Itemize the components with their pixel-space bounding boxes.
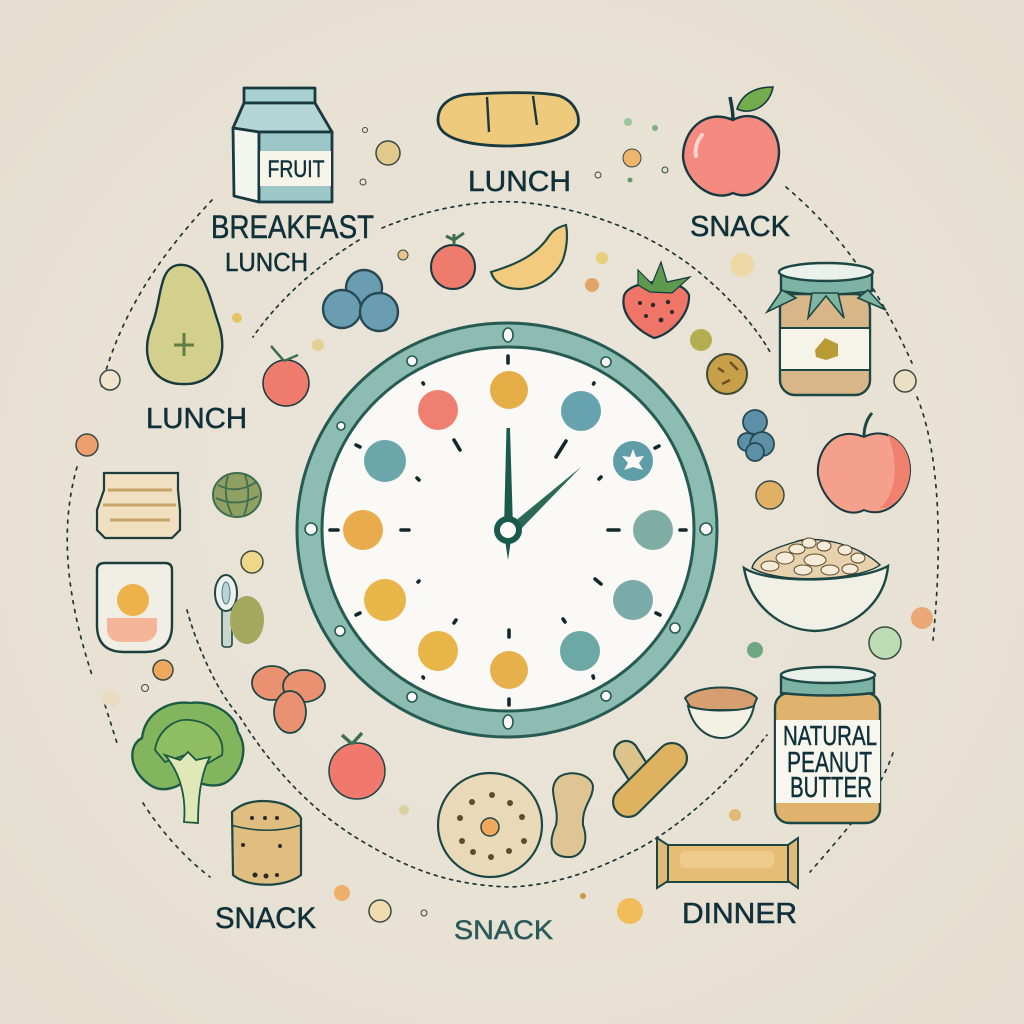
meal dots: [490, 371, 528, 409]
icon: natural peanut butter jar: BUTTER: [790, 772, 872, 804]
label: snack bottom centre: SNACK: [454, 915, 553, 945]
icon: small tomato top: [431, 233, 475, 289]
icon: tomato left: [263, 346, 309, 406]
dotted inner path: [187, 202, 770, 887]
icon: green artichoke: [213, 473, 261, 517]
label: lunch left: LUNCH: [146, 403, 247, 435]
icon: red leaf cluster: [252, 666, 325, 733]
icon: peanuts: [607, 736, 693, 823]
icon: granola bar: [657, 838, 798, 888]
icon: green fruit: [230, 596, 264, 644]
icon: melon slice: [491, 225, 567, 289]
icon: pear: [147, 265, 222, 384]
icon: muffin loaf: [231, 801, 301, 885]
dotted outer path: [67, 187, 938, 877]
icon: spoon: [215, 575, 237, 647]
label: snack top right: SNACK: [690, 211, 791, 243]
hour ticks: [330, 356, 686, 705]
scattered seeds: [76, 118, 933, 924]
icon: round cracker: [438, 773, 542, 877]
icon: yogurt cup: [97, 563, 172, 652]
icon: small blueberries right: [738, 410, 774, 461]
rim studs: [305, 328, 712, 729]
icon: bread roll: [438, 93, 578, 146]
icon: apple right: [818, 413, 910, 513]
label: dinner: DINNER: [682, 898, 797, 930]
label: lunch under breakfast: LUNCH: [225, 247, 308, 277]
icon: jar with lid top right: [767, 263, 886, 395]
icon: natural peanut butter jar: [775, 667, 880, 823]
icon: natural peanut butter jar: PEANUT: [787, 747, 872, 779]
icon: blueberries: [323, 270, 398, 331]
label: lunch top: LUNCH: [468, 166, 571, 198]
clock hands: [497, 428, 581, 560]
icon: strawberry: [623, 262, 690, 338]
label: snack bottom left: SNACK: [215, 902, 316, 935]
clock rim: [297, 323, 717, 737]
icon: milk carton: FRUIT: [268, 156, 325, 183]
icon: small bowl: [685, 688, 757, 738]
clock: [297, 323, 717, 737]
icon: sandwich: [97, 473, 180, 538]
icon: milk carton: [233, 88, 332, 202]
icon: cereal bowl: [744, 538, 888, 631]
icon: apple top right: [683, 87, 779, 196]
label: breakfast: BREAKFAST: [211, 209, 374, 245]
icon: bone shaped nut: [552, 773, 593, 857]
icon: tomato bottom: [329, 733, 385, 799]
icon: natural peanut butter jar: NATURAL: [783, 720, 877, 751]
clock face: [322, 347, 694, 711]
icon: broccoli: [132, 703, 243, 823]
icon: nut cookie: [707, 354, 747, 394]
